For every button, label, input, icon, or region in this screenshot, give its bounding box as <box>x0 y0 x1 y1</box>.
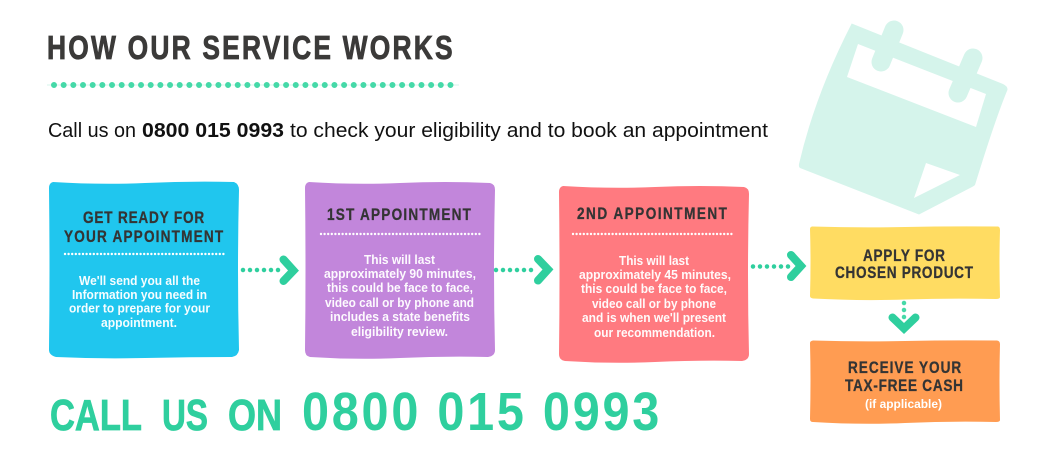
heading: RECEIVE YOUR <box>848 359 961 377</box>
heading: 1ST APPOINTMENT <box>327 206 472 224</box>
body text: approximately 45 minutes, <box>579 268 731 282</box>
title dotted divider <box>47 84 459 86</box>
body text: video call or by phone <box>592 297 716 311</box>
body text <box>324 253 476 339</box>
body text: this could be face to face, <box>327 281 473 295</box>
arrow: step 2 to step 3 <box>496 259 548 280</box>
body text <box>579 254 731 340</box>
call to action phone number: CALL <box>50 391 142 440</box>
call to action phone number <box>50 381 659 442</box>
intro sentence: Call us on <box>48 120 136 142</box>
dotted divider <box>321 233 480 235</box>
heading: GET READY FOR <box>83 209 204 227</box>
heading: YOUR APPOINTMENT <box>64 228 224 246</box>
icon: calendar <box>799 24 1008 214</box>
body text: our recommendation. <box>594 326 715 340</box>
body text: video call or by phone and <box>325 296 474 310</box>
dotted divider <box>65 253 224 255</box>
body text: This will last <box>619 254 690 268</box>
call to action phone number: 0800 015 0993 <box>302 381 659 442</box>
body text: eligibility review. <box>351 325 448 339</box>
arrow: apply to receive <box>892 303 916 328</box>
note: (if applicable) <box>865 397 942 411</box>
body text: includes a state benefits <box>330 310 470 324</box>
panel: get ready for your appointment <box>49 182 239 358</box>
panel: receive your tax-free cash <box>810 340 1000 424</box>
panel: apply for chosen product <box>810 226 1000 300</box>
heading <box>845 359 963 395</box>
body text: This will last <box>364 253 436 267</box>
dotted divider <box>573 233 733 235</box>
body text: Information you need in <box>72 288 207 302</box>
intro sentence: to check your eligibility and to book an appointment <box>290 120 768 142</box>
arrow: step 3 to apply <box>753 255 801 277</box>
body text: and is when we'll present <box>582 311 727 325</box>
heading: CHOSEN PRODUCT <box>835 264 974 282</box>
body text: approximately 90 minutes, <box>324 267 476 281</box>
body text <box>69 274 210 330</box>
body text: this could be face to face, <box>581 282 727 296</box>
call to action phone number: US <box>162 391 208 440</box>
heading <box>64 209 224 246</box>
heading <box>835 247 974 282</box>
panel: 2nd appointment <box>559 186 749 363</box>
arrow: step 1 to step 2 <box>243 260 294 281</box>
panel: 1st appointment <box>305 182 495 359</box>
heading: 2ND APPOINTMENT <box>577 205 728 223</box>
intro sentence <box>48 120 768 142</box>
title: HOW OUR SERVICE WORKS <box>47 30 453 67</box>
call to action phone number: ON <box>228 391 282 440</box>
body text: order to prepare for your <box>69 302 210 316</box>
body text: appointment. <box>101 316 177 330</box>
heading: TAX-FREE CASH <box>845 377 963 395</box>
body text: We'll send you all the <box>79 274 200 288</box>
heading: APPLY FOR <box>863 247 945 265</box>
intro sentence: 0800 015 0993 <box>142 120 284 142</box>
